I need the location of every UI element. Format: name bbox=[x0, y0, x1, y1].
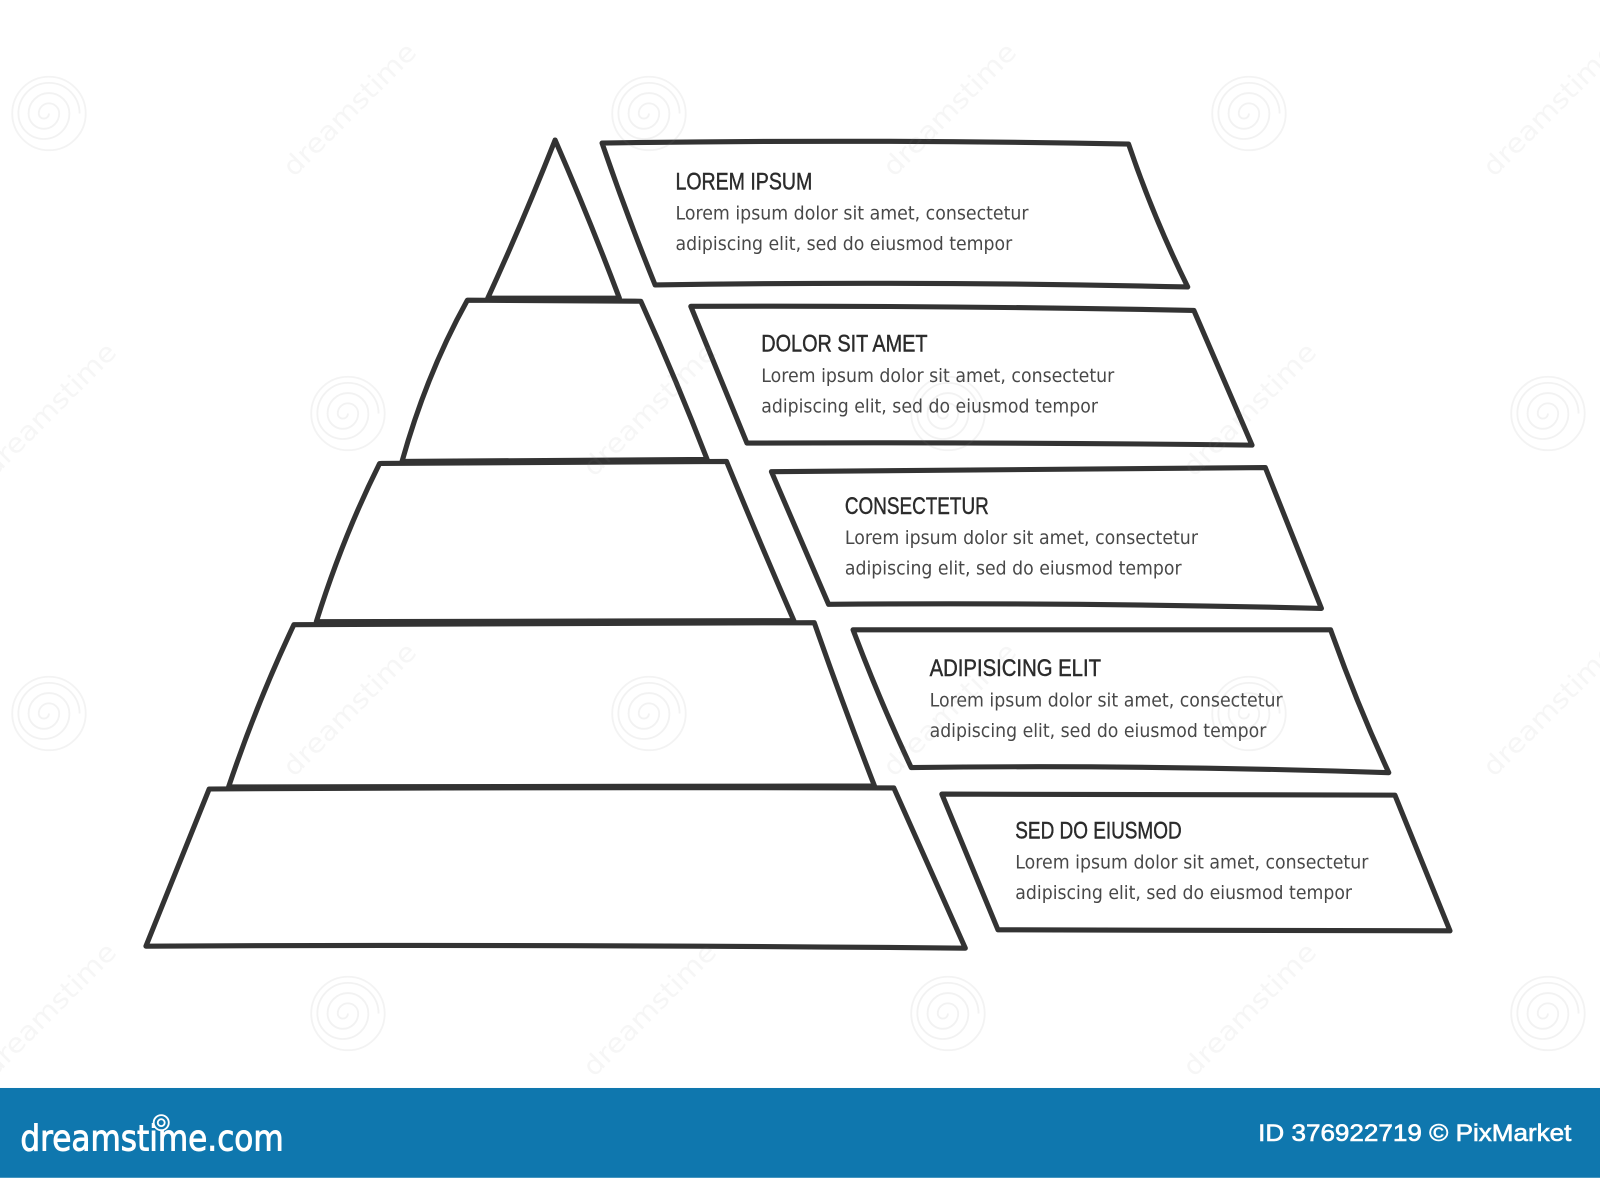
watermark pattern: dreamstime bbox=[277, 37, 423, 183]
heading: consectetur: CONSECTETUR bbox=[845, 493, 989, 520]
pyramid tier 2 bbox=[402, 300, 707, 461]
text block: dolor sit amet: adipiscing elit, sed do eiusmod tempor bbox=[761, 396, 1098, 417]
text block: consectetur: adipiscing elit, sed do eiusmod tempor bbox=[845, 559, 1182, 580]
watermark pattern: dreamstime bbox=[577, 337, 723, 483]
pyramid tier 4 bbox=[229, 623, 874, 787]
panel: adipisicing elit bbox=[853, 630, 1389, 773]
pyramid tier 3 bbox=[316, 461, 794, 622]
heading: adipisicing elit: ADIPISICING ELIT bbox=[930, 655, 1101, 682]
watermark pattern: dreamstime bbox=[277, 637, 423, 783]
footer band bbox=[0, 1088, 1600, 1178]
heading: dolor sit amet: DOLOR SIT AMET bbox=[761, 331, 928, 358]
watermark pattern: dreamstime bbox=[877, 637, 1023, 783]
panel: consectetur bbox=[771, 468, 1321, 608]
panel: dolor sit amet bbox=[691, 306, 1252, 445]
text block: adipisicing elit: adipiscing elit, sed do eiusmod tempor bbox=[930, 721, 1267, 742]
watermark pattern: dreamstime bbox=[1177, 337, 1323, 483]
watermark pattern: dreamstime bbox=[577, 937, 723, 1083]
footer image id and credit: ID 376922719 © PixMarket bbox=[1258, 1120, 1572, 1147]
text block: lorem ipsum: adipiscing elit, sed do eiusmod tempor bbox=[676, 234, 1013, 255]
watermark pattern: dreamstime bbox=[1177, 937, 1323, 1083]
pyramid tier 1 (tip) bbox=[488, 140, 619, 298]
pyramid tier 5 (base) bbox=[146, 788, 965, 948]
text block: dolor sit amet: Lorem ipsum dolor sit amet, consectetur bbox=[761, 366, 1115, 387]
text block: sed do eiusmod: adipiscing elit, sed do eiusmod tempor bbox=[1015, 883, 1352, 904]
text block: consectetur: Lorem ipsum dolor sit amet, consectetur bbox=[845, 528, 1198, 549]
watermark pattern: dreamstime bbox=[877, 37, 1023, 183]
heading: lorem ipsum: LOREM IPSUM bbox=[676, 169, 812, 196]
heading: sed do eiusmod: SED DO EIUSMOD bbox=[1015, 817, 1182, 844]
panel: sed do eiusmod bbox=[942, 794, 1450, 931]
footer logo: dreamstime.com bbox=[20, 1119, 284, 1160]
text block: sed do eiusmod: Lorem ipsum dolor sit amet, consectetur bbox=[1015, 853, 1369, 874]
text block: lorem ipsum: Lorem ipsum dolor sit amet, consectetur bbox=[676, 204, 1029, 225]
text block: adipisicing elit: Lorem ipsum dolor sit amet, consectetur bbox=[930, 690, 1283, 711]
pyramid bbox=[146, 140, 965, 948]
icon: logo spiral bbox=[154, 1115, 169, 1130]
panel: lorem ipsum bbox=[602, 141, 1188, 287]
